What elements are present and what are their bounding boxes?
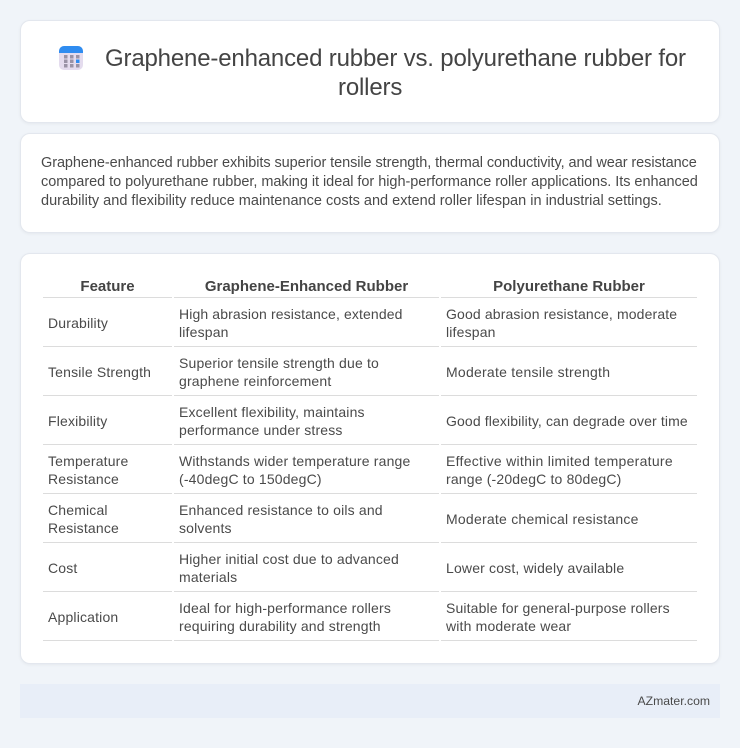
row: Flexibility <box>48 404 688 438</box>
table header: Graphene-Enhanced Rubber: Graphene-Enhanced Rubber <box>205 278 408 295</box>
row: Cost: Lower cost, widely available <box>446 560 624 576</box>
row: Flexibility: performance under stress <box>179 422 343 438</box>
row: Chemical Resistance <box>48 502 639 536</box>
row: Application: Application <box>48 609 118 625</box>
row: Cost: Cost <box>48 560 77 576</box>
row: Cost: materials <box>179 569 237 585</box>
panel: summary card <box>20 133 720 233</box>
row: Durability: Good abrasion resistance, moderate <box>446 306 677 322</box>
row: Cost <box>48 551 624 585</box>
row: Temperature Resistance: range (-20degC to 80degC) <box>446 471 621 487</box>
row: Durability: lifespan <box>446 324 496 340</box>
title: Graphene-enhanced rubber vs. polyurethane rubber for <box>105 45 686 72</box>
row: Temperature Resistance: Resistance <box>48 471 119 487</box>
summary text: durability and flexibility reduce maintenance costs and extend roller lifespan in industrial settings. <box>41 193 662 209</box>
row: Flexibility: Flexibility <box>48 413 107 429</box>
row: Tensile Strength: Superior tensile strength due to <box>179 355 379 371</box>
row: Chemical Resistance: Moderate chemical resistance <box>446 511 639 527</box>
row: Temperature Resistance: Withstands wider temperature range <box>179 453 410 469</box>
panel: title card <box>20 20 720 123</box>
row: Tensile Strength: Tensile Strength <box>48 364 151 380</box>
row: Tensile Strength: Moderate tensile strength <box>446 364 610 380</box>
summary text <box>41 155 698 209</box>
footer bar <box>20 684 720 718</box>
row: Tensile Strength: graphene reinforcement <box>179 373 331 389</box>
row: Application: requiring durability and strength <box>179 618 381 634</box>
footer credit: AZmater.com <box>638 694 710 708</box>
row: Temperature Resistance <box>48 453 673 487</box>
title second line: rollers <box>338 74 402 101</box>
row: Cost: Higher initial cost due to advanced <box>179 551 399 567</box>
row: Chemical Resistance: Enhanced resistance to oils and <box>179 502 383 518</box>
row: Tensile Strength <box>48 355 610 389</box>
row: Durability <box>48 306 677 340</box>
row: Durability: High abrasion resistance, extended <box>179 306 403 322</box>
row: Chemical Resistance: solvents <box>179 520 232 536</box>
row: Chemical Resistance: Chemical <box>48 502 108 518</box>
panel: comparison table card <box>20 253 720 664</box>
table header: Polyurethane Rubber: Polyurethane Rubber <box>493 278 645 295</box>
row: Application <box>48 600 670 634</box>
summary text: Graphene-enhanced rubber exhibits superior tensile strength, thermal conductivity, and wear resistance <box>41 155 697 171</box>
row: Durability: Durability <box>48 315 108 331</box>
row: Durability: lifespan <box>179 324 229 340</box>
summary text: compared to polyurethane rubber, making it ideal for high-performance roller applications. Its enhanced <box>41 174 698 190</box>
row: Application: with moderate wear <box>446 618 571 634</box>
row: Temperature Resistance: (-40degC to 150degC) <box>179 471 322 487</box>
row: Flexibility: Good flexibility, can degrade over time <box>446 413 688 429</box>
row: Temperature Resistance: Effective within limited temperature <box>446 453 673 469</box>
row: Application: Ideal for high-performance rollers <box>179 600 391 616</box>
table header: Feature: Feature <box>80 278 135 295</box>
row: Flexibility: Excellent flexibility, maintains <box>179 404 365 420</box>
row: Application: Suitable for general-purpose rollers <box>446 600 670 616</box>
row: Chemical Resistance: Resistance <box>48 520 119 536</box>
icon: calendar <box>59 46 83 70</box>
row: Temperature Resistance: Temperature <box>48 453 128 469</box>
